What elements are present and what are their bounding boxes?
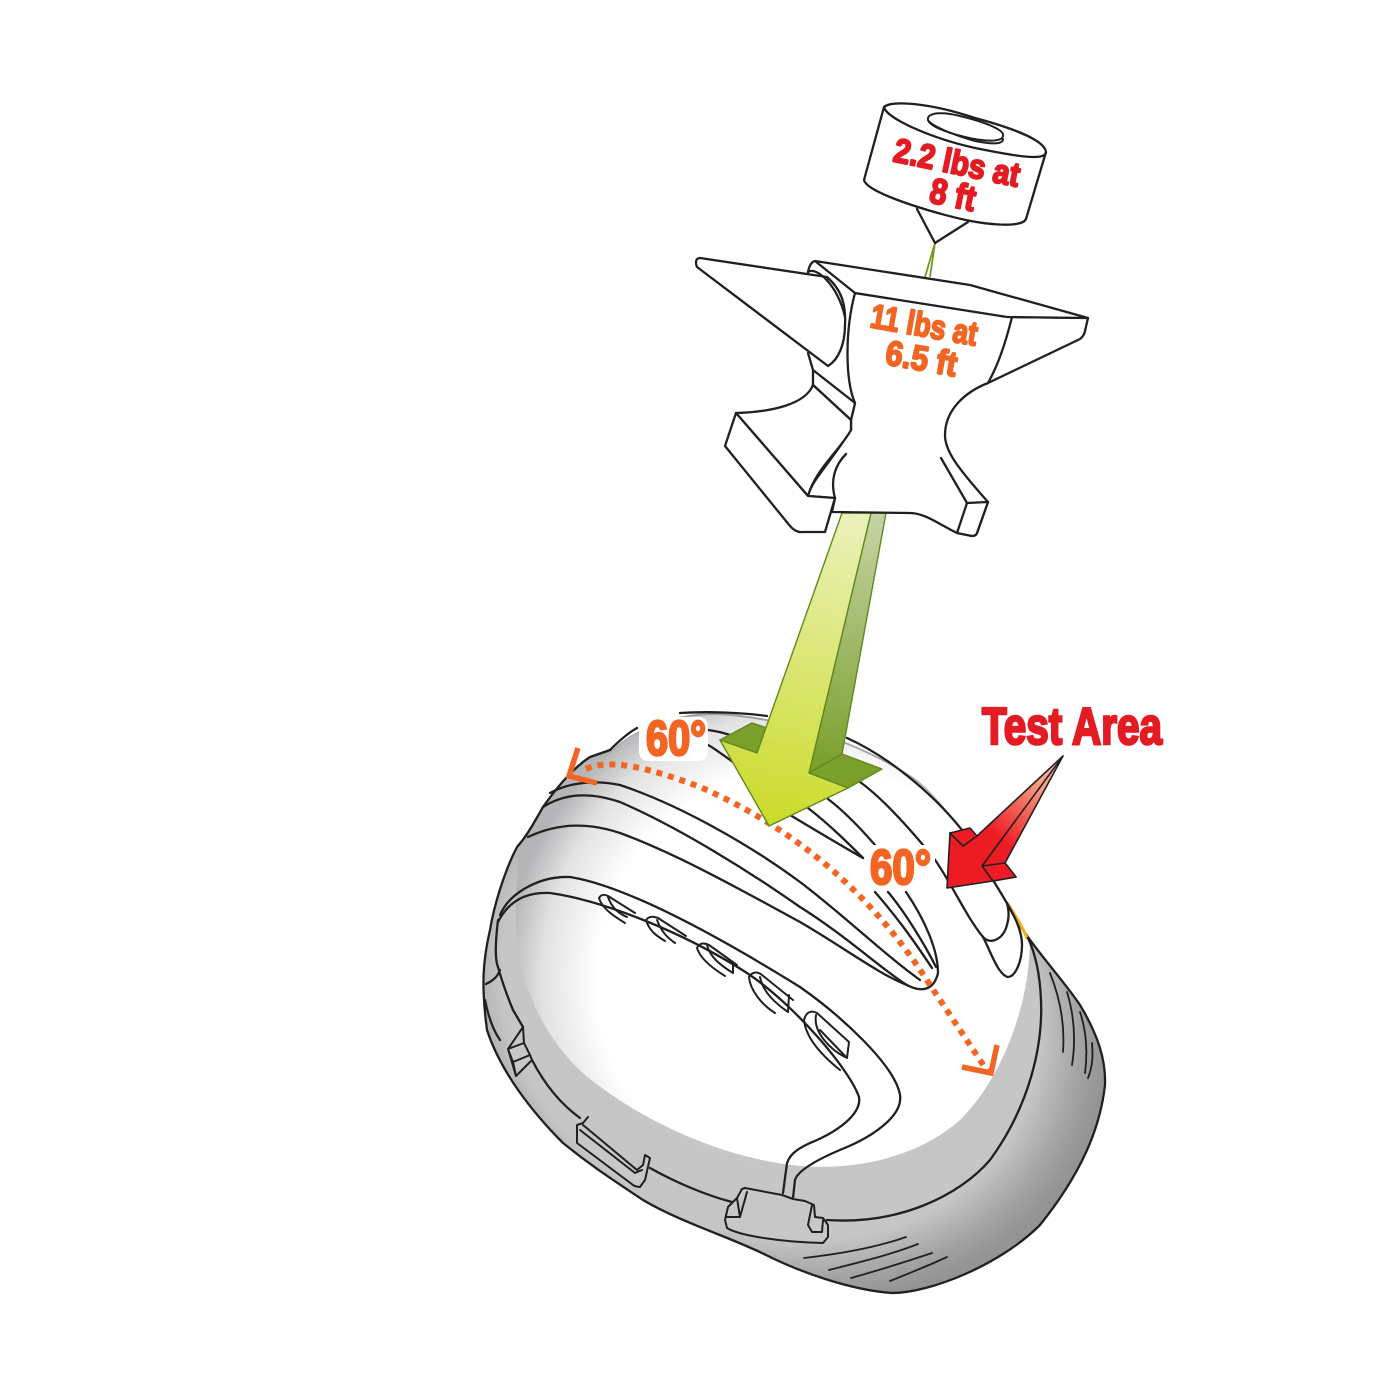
disc weight label: 2.2 lbs at: [890, 132, 1023, 195]
anvil neck: [808, 353, 855, 420]
red test area arrow: [947, 756, 1063, 888]
label: 60 degrees right: 60°: [870, 841, 931, 895]
side clip left: [508, 1027, 532, 1076]
helmet shell: [483, 713, 1105, 1293]
anvil weight label: 6.5 ft: [883, 333, 961, 384]
bottom hatch lines: [804, 1237, 947, 1281]
anvil weight label: [868, 297, 981, 384]
dotted arc: 60 degree test line: [569, 748, 997, 1073]
visor band: [486, 877, 900, 1202]
disc weight label: 8 ft: [926, 170, 980, 219]
label: 60 degrees top: 60°: [646, 712, 706, 766]
anvil weight label: 11 lbs at: [868, 297, 981, 354]
green guide string: [925, 243, 935, 277]
label: Test Area: Test Area: [982, 698, 1163, 756]
helmet: [483, 712, 1105, 1293]
disc weight: [864, 103, 1046, 243]
yellow accent: [1008, 904, 1027, 938]
helmet dome highlight: [516, 715, 1030, 1167]
right hatch lines: [1050, 973, 1093, 1078]
green impact arrow: [720, 513, 886, 826]
anvil base left: [736, 385, 851, 496]
anvil top face: [808, 261, 1088, 318]
chin clip: [725, 1188, 828, 1243]
anvil horn: [696, 258, 845, 366]
anvil base right: [957, 502, 988, 536]
ridge lines: [485, 730, 1041, 1221]
anvil weight: [696, 258, 1088, 536]
helmet outline: [483, 712, 1105, 1293]
side clip bottom: [577, 1117, 650, 1187]
vents: [599, 895, 849, 1070]
disc weight label: [890, 132, 1023, 219]
anvil body silhouette: [808, 293, 1088, 536]
